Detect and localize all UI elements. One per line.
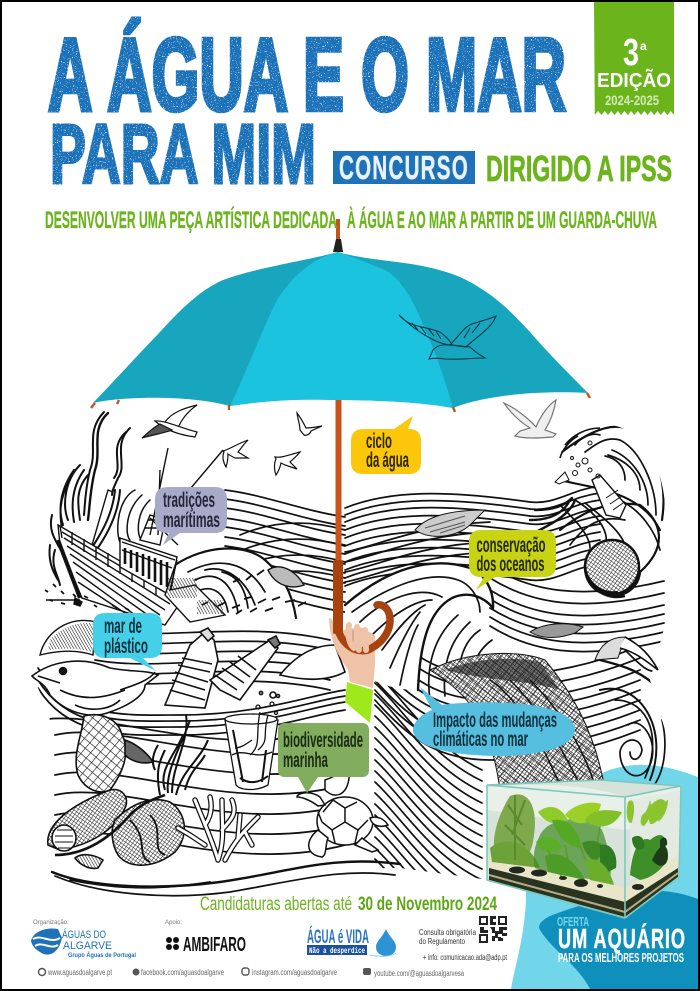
hand holding the umbrella	[329, 618, 375, 723]
QR code	[479, 916, 507, 943]
aquarium plants	[490, 794, 668, 890]
logo: Ambifaro: Apoio:	[165, 920, 182, 926]
logo: Águas do Algarve: Organização:	[33, 920, 69, 926]
regulation note and QR code: do Regulamento	[419, 937, 465, 946]
edition badge: 3	[623, 32, 639, 74]
logo: Água é Vida	[307, 926, 396, 956]
umbrella	[91, 219, 590, 412]
illustration: birds	[142, 400, 556, 475]
deadline: Candidaturas abertas até	[200, 894, 352, 915]
green sleeve	[345, 682, 373, 723]
illustration: sea waves line art	[37, 426, 666, 879]
logo: Águas do Algarve: ALGARVE	[63, 940, 112, 952]
right crest lines	[530, 427, 665, 790]
icon: seagull on umbrella	[399, 315, 496, 359]
edition badge: a	[640, 39, 647, 53]
deadline: 30 de Novembro 2024	[358, 894, 497, 915]
social links	[38, 968, 464, 978]
callout: tradições marítimas	[155, 487, 227, 545]
callout: conservação dos oceanos: conservação	[476, 534, 546, 557]
umbrella ferrule	[333, 219, 343, 252]
callout: ciclo da água: ciclo	[366, 430, 392, 453]
callout: mar de plástico	[93, 613, 162, 671]
regulation note and QR code: Consulta obrigatória	[419, 928, 476, 937]
callout: conservação dos oceanos	[469, 530, 556, 590]
illustration: aquarium	[487, 780, 681, 918]
callout: tradições marítimas: tradições	[163, 489, 215, 512]
illustration: sea turtle	[297, 772, 388, 857]
illustration: large net right	[430, 653, 605, 790]
callout: ciclo da água: da água	[366, 449, 409, 472]
regulation note and QR code	[419, 916, 508, 962]
illustration: water glass	[225, 702, 278, 790]
callout: biodiversidade marinha	[278, 723, 369, 793]
logo: Ambifaro	[165, 920, 246, 956]
illustration: net ball	[585, 540, 640, 597]
callout: impacto das mudanças climáticas no mar: Impacto das mudanças	[433, 709, 557, 732]
illustration: fishing boat	[40, 448, 306, 655]
callout: ciclo da água	[351, 416, 421, 474]
offer text	[557, 914, 686, 965]
social links: facebook.com/aguasdoalgarve	[141, 968, 224, 977]
edition badge: 2024-2025	[605, 92, 659, 108]
aquarium gravel	[489, 856, 678, 908]
logo: Água é Vida: Não a desperdice	[309, 946, 365, 956]
callout: impacto das mudanças climáticas no mar: climáticas no mar	[433, 728, 528, 751]
callout: tradições marítimas: marítimas	[163, 509, 220, 532]
callout: impacto das mudanças climáticas no mar	[413, 687, 575, 756]
illustration: left seaweed	[49, 412, 150, 585]
title: PARA MIM	[50, 107, 316, 201]
callout: biodiversidade marinha: biodiversidade	[283, 729, 363, 752]
umbrella canopy	[93, 252, 588, 408]
logo: Águas do Algarve: ÁGUAS DO	[62, 928, 106, 941]
social links: www.aguasdoalgarve.pt	[47, 968, 113, 977]
callout: conservação dos oceanos: dos oceanos	[476, 553, 544, 576]
umbrella tips	[91, 393, 590, 412]
flow line families	[37, 486, 665, 879]
regulation note and QR code: + info: comunicacao.ada@adp.pt	[423, 953, 508, 962]
illustration: lower left net and bottle	[48, 715, 208, 868]
illustration: plastic bottles and dolphin	[32, 628, 345, 715]
illustration: bottom wave	[52, 861, 400, 896]
logo: Águas do Algarve: Grupo Águas de Portugal	[68, 950, 136, 959]
edition badge	[594, 2, 674, 115]
subtitle: DESENVOLVER UMA PEÇA ARTÍSTICA DEDICADA	[45, 206, 337, 234]
illustration: coral	[178, 797, 258, 860]
logo: Água é Vida: ÁGUA é VIDA	[307, 926, 369, 948]
edition badge: EDIÇÃO	[597, 69, 671, 92]
aquarium glass edges	[487, 780, 681, 918]
illustration: fish, bottle and shell right	[415, 428, 658, 670]
panel: offer background shapes	[511, 765, 698, 989]
social links: youtube.com/@aguasdoalgarvesa	[374, 969, 464, 978]
logo: Águas do Algarve	[31, 920, 136, 959]
umbrella shaft and handle	[333, 400, 390, 651]
callout: mar de plástico: mar de	[104, 615, 142, 638]
callout: biodiversidade marinha: marinha	[283, 749, 328, 772]
offer text: OFERTA	[557, 914, 589, 929]
illustration: wave crests	[175, 549, 493, 700]
social links: instagram.com/aguasdoalgarve	[252, 968, 337, 977]
heading: concurso label	[333, 149, 475, 186]
heading: concurso label: CONCURSO	[339, 149, 469, 186]
callout: mar de plástico: plástico	[104, 635, 148, 658]
title	[48, 17, 566, 201]
logo: Ambifaro: AMBIFARO	[183, 934, 246, 956]
